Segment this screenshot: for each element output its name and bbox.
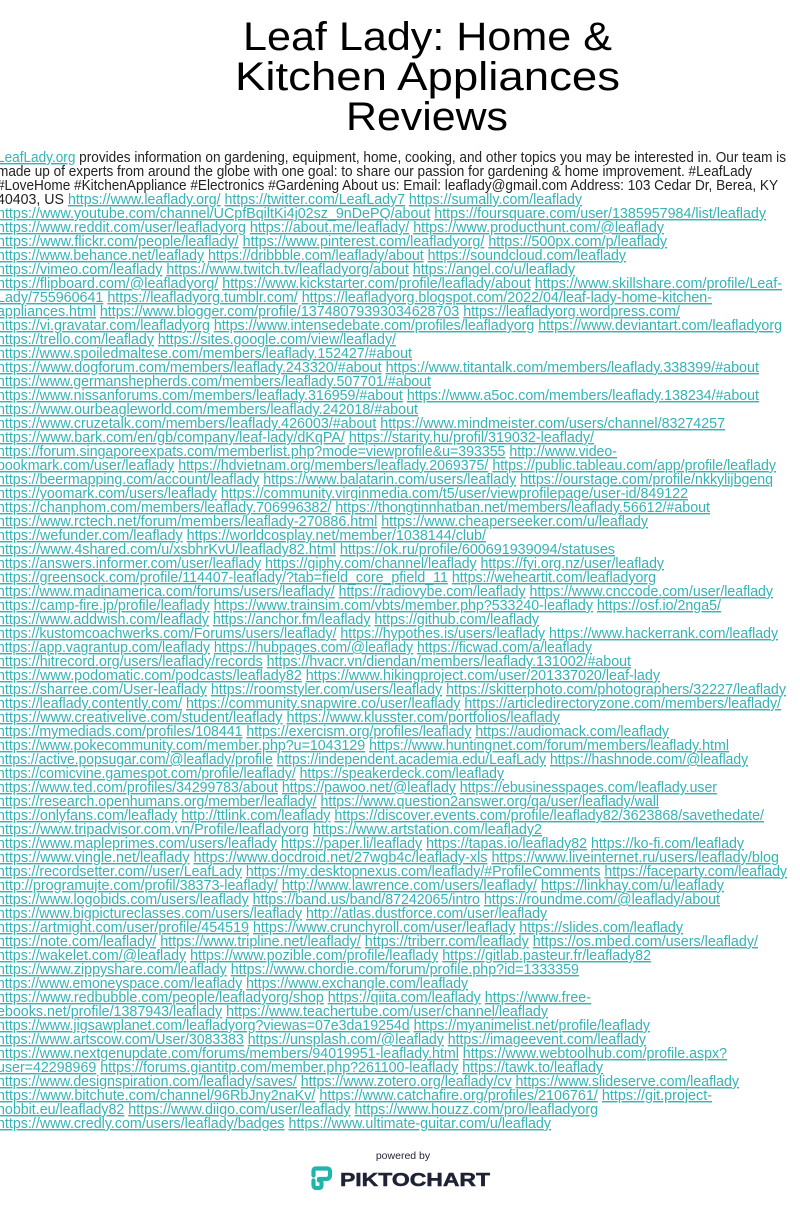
text block: description and link list: https://chanphom.com/members/leaflady.706996382/ https://thongtinnhatban.net/members/leaflady.56612/#about [0,500,710,516]
icon: piktochart logo mark [314,1168,330,1188]
text block: description and link list: https://www.ourbeagleworld.com/members/leaflady.242018/#about [0,402,418,418]
text block: description and link list: hobbit.eu/leaflady82 https://www.diigo.com/user/leaflady https://www.houzz.com/pro/leafladyorg [0,1102,598,1118]
text block: description and link list: https://www.reddit.com/user/leafladyorg https://about.me/leaflady/ https://www.producthunt.com/@leaflady [0,220,665,236]
text block: description and link list: Lady/755960641 https://leafladyorg.tumblr.com/ https://leafladyorg.blogspot.com/2022/04/leaf-lady-home-kitchen- [0,290,712,306]
text block: description and link list: https://www.creativelive.com/student/leaflady https://www.klusster.com/portfolios/leaflady [0,710,561,726]
text block: description and link list: https://www.rctech.net/forum/members/leaflady-270886.html https://www.cheaperseeker.com/u/leaflady [0,514,649,530]
text block: description and link list: https://www.bigpictureclasses.com/users/leaflady http://atlas.dustforce.com/user/leaflady [0,906,548,922]
title: Leaf Lady: Home & [243,15,612,59]
title [235,15,620,139]
text block: description and link list: https://sharree.com/User-leaflady https://roomstyler.com/users/leaflady https://skitterphoto.com/photographers/32227/leaflady [0,682,787,698]
title: Reviews [346,95,508,139]
text block: description and link list: https://vimeo.com/leaflady https://www.twitch.tv/leafladyorg/about https://angel.co/u/leaflady [0,262,576,278]
text block: description and link list: https://www.nextgenupdate.com/forums/members/94019951-leaflady.html https://www.webtoolhub.com/profile.aspx? [0,1046,727,1062]
text block: description and link list: https://greensock.com/profile/114407-leaflady/?tab=field_core_pfield_11 https://weheartit.com/leafladyorg [0,570,656,586]
text block: description and link list: https://www.youtube.com/channel/UCpfBqiltKi4j02sz_9nDePQ/about https://foursquare.com/user/1385957984/list/leaflady [0,206,767,222]
text block: description and link list: https://www.bitchute.com/channel/96RbJny2naKv/ https://www.catchafire.org/profiles/2106761/ https://git.project- [0,1088,712,1104]
text block: description and link list: https://www.spoiledmaltese.com/members/leaflady.152427/#about [0,346,412,362]
text block: description and link list: https://www.designspiration.com/leaflady/saves/ https://www.zotero.org/leaflady/cv https://www.slideserve.com/leaflady [0,1074,740,1090]
text block: description and link list: https://www.cruzetalk.com/members/leaflady.426003/#about https://www.mindmeister.com/users/channel/83274257 [0,416,725,432]
text block: description and link list: appliances.html https://www.blogger.com/profile/13748079393034628703 https://leafladyorg.wordpress.com/ [0,304,680,320]
text block: description and link list: https://vi.gravatar.com/leafladyorg https://www.intensedebate.com/profiles/leafladyorg https://www.deviantart.com/leafladyorg [0,318,782,334]
text block: description and link list: https://onlyfans.com/leaflady http://ttlink.com/leaflady https://discover.events.com/profile/leaflady82/3623868/savethedate/ [0,808,764,824]
text block: description and link list: https://www.vingle.net/leaflady https://www.docdroid.net/27wgb4c/leaflady-xls https://www.liveinternet.ru/users/leaflady/blog [0,850,779,866]
text block: description and link list: https://forum.singaporeexpats.com/memberlist.php?mode=viewprofile&u=393355 http://www.video- [0,444,617,460]
text block: description and link list: https://www.addwish.com/leaflady https://anchor.fm/leaflady https://github.com/leaflady [0,612,540,628]
text block: description and link list: https://www.podomatic.com/podcasts/leaflady82 https://www.hikingproject.com/user/201337020/leaf-lady [0,668,661,684]
text block: description and link list: https://www.redbubble.com/people/leafladyorg/shop https://qiita.com/leaflady https://www.free- [0,990,591,1006]
text block: description and link list: https://yoomark.com/users/leaflady https://community.virginmedia.com/t5/user/viewprofilepage/user-id/849122 [0,486,688,502]
text block: description and link list: https://www.zippyshare.com/leaflady https://www.chordie.com/forum/profile.php?id=1333359 [0,962,579,978]
text block: description and link list: https://research.openhumans.org/member/leaflady/ https://www.question2answer.org/qa/user/leaflady/wall [0,794,659,810]
text block: description and link list: https://artmight.com/user/profile/454519 https://www.crunchyroll.com/user/leaflady https://slides.com/leaflady [0,920,684,936]
text block: description and link list: https://www.4shared.com/u/xsbhrKvU/leaflady82.html https://ok.ru/profile/600691939094/statuses [0,542,615,558]
text block: description and link list: https://www.ted.com/profiles/34299783/about https://pawoo.net/@leaflady https://ebusinesspages.com/leaflady.user [0,780,717,796]
text block: description and link list: https://leaflady.contently.com/ https://community.snapwire.co/user/leaflady https://articledirectoryzone.com/members/leaflady/ [0,696,781,712]
text block: description and link list: https://beermapping.com/account/leaflady https://www.balatarin.com/users/leaflady https://ourstage.com/profile/nkkylijbgenq [0,472,773,488]
text block: description and link list: https://www.pokecommunity.com/member.php?u=1043129 https://www.huntingnet.com/forum/members/leaflady.html [0,738,729,754]
text block: description and link list: https://www.mapleprimes.com/users/leaflady https://paper.li/leaflady https://tapas.io/leaflady82 https://ko-fi.com/leaflady [0,836,745,852]
text block: description and link list: https://www.dogforum.com/members/leaflady.243320/#about https://www.titantalk.com/members/leaflady.338399/#about [0,360,759,376]
text block: description and link list: https://kustomcoachwerks.com/Forums/users/leaflady/ https://hypothes.is/users/leaflady https://www.hackerrank.com/leaflady [0,626,779,642]
text block: description and link list: https://flipboard.com/@leafladyorg/ https://www.kickstarter.com/profile/leaflady/about https://www.skillshare.com/profile/Leaf- [0,276,782,292]
text block: description and link list: https://app.vagrantup.com/leaflady https://hubpages.com/@leaflady https://ficwad.com/a/leaflady [0,640,593,656]
text block: description and link list: https://mymediads.com/profiles/108441 https://exercism.org/profiles/leaflady https://audiomack.com/leaflady [0,724,670,740]
text block: description and link list: https://hitrecord.org/users/leaflady/records https://hvacr.vn/diendan/members/leaflady.131002/#about [0,654,631,670]
text block: description and link list: https://www.behance.net/leaflady https://dribbble.com/leaflady/about https://soundcloud.com/leaflady [0,248,627,264]
text block: description and link list: https://www.madinamerica.com/forums/users/leaflady/ https://radiovybe.com/leaflady https://www.cnccode.com/user/leaflady [0,584,774,600]
text block: description and link list: https://www.credly.com/users/leaflady/badges https://www.ultimate-guitar.com/u/leaflady [0,1116,552,1132]
text block: description and link list: made up of experts from around the globe with one goal: to share our passion for gardening & home improvement. #LeafLady [0,164,753,180]
text block: description and link list: https://comicvine.gamespot.com/profile/leaflady/ https://speakerdeck.com/leaflady [0,766,505,782]
text block: description and link list: https://wakelet.com/@leaflady https://www.pozible.com/profile/leaflady https://gitlab.pasteur.fr/leaflady82 [0,948,651,964]
text block: description and link list: user=42298969 https://forums.giantitp.com/member.php?261100-leaflady https://tawk.to/leaflady [0,1060,604,1076]
text block: description and link list: https://recordsetter.com//user/LeafLady https://my.desktopnexus.com/leaflady/#ProfileComments https://faceparty.com/leaflady [0,864,788,880]
piktochart wordmark: PIKTOCHART [340,1169,491,1190]
text block: description and link list: https://answers.informer.com/user/leaflady https://giphy.com/channel/leaflady https://fyi.org.nz/user/leaflady [0,556,665,572]
text block: description and link list: https://camp-fire.jp/profile/leaflady https://www.trainsim.com/vbts/member.php?533240-leaflady https://osf.io/2nga5/ [0,598,721,614]
text block: description and link list: https://note.com/leaflady/ https://www.tripline.net/leaflady/ https://triberr.com/leaflady https://os.mbed.com/users/leaflady/ [0,934,758,950]
text block: description and link list: https://www.germanshepherds.com/members/leaflady.507701/#about [0,374,431,390]
text block: description and link list: https://wefunder.com/leaflady https://worldcosplay.net/member/1038144/club/ [0,528,486,544]
text block: description and link list: https://www.artscow.com/User/3083383 https://unsplash.com/@leaflady https://imageevent.com/leaflady [0,1032,647,1048]
powered by label: powered by [376,1150,431,1162]
text block: description and link list: https://active.popsugar.com/@leaflady/profile https://independent.academia.edu/LeafLady https://hashnode.com/@leaflady [0,752,749,768]
text block: description and link list: https://trello.com/leaflady https://sites.google.com/view/leaflady/ [0,332,396,348]
text block: description and link list: 40403, US https://www.leaflady.org/ https://twitter.com/LeafLady7 https://sumally.com/leaflady [0,192,583,208]
text block: description and link list: ebooks.net/profile/1387943/leaflady https://www.teachertube.com/user/channel/leaflady [0,1004,549,1020]
title: Kitchen Appliances [235,55,620,99]
text block: description and link list: https://www.flickr.com/people/leaflady/ https://www.pinterest.com/leafladyorg/ https://500px.com/p/leaflady [0,234,668,250]
text block: description and link list: https://www.bark.com/en/gb/company/leaf-lady/dKqPA/ https://starity.hu/profil/319032-leaflady/ [0,430,594,446]
text block: description and link list: https://www.tripadvisor.com.vn/Profile/leafladyorg https://www.artstation.com/leaflady2 [0,822,542,838]
text block: description and link list: https://www.logobids.com/users/leaflady https://band.us/band/87242065/intro https://roundme.com/@leaflady/about [0,892,720,908]
text block: description and link list: https://www.nissanforums.com/members/leaflady.316959/#about https://www.a5oc.com/members/leaflady.138234/#about [0,388,759,404]
text block: description and link list: http://programujte.com/profil/38373-leaflady/ http://www.lawrence.com/users/leaflady/ https://linkhay.com/u/leaflady [0,878,725,894]
text block: description and link list [0,150,788,1132]
text block: description and link list: https://www.emoneyspace.com/leaflady https://www.exchangle.com/leaflady [0,976,469,992]
text block: description and link list: bookmark.com/user/leaflady https://hdvietnam.org/members/leaflady.2069375/ https://public.tableau.com/app/profile/leaflady [0,458,777,474]
text block: description and link list: https://www.jigsawplanet.com/leafladyorg?viewas=07e3da19254d https://myanimelist.net/profile/leaflady [0,1018,651,1034]
